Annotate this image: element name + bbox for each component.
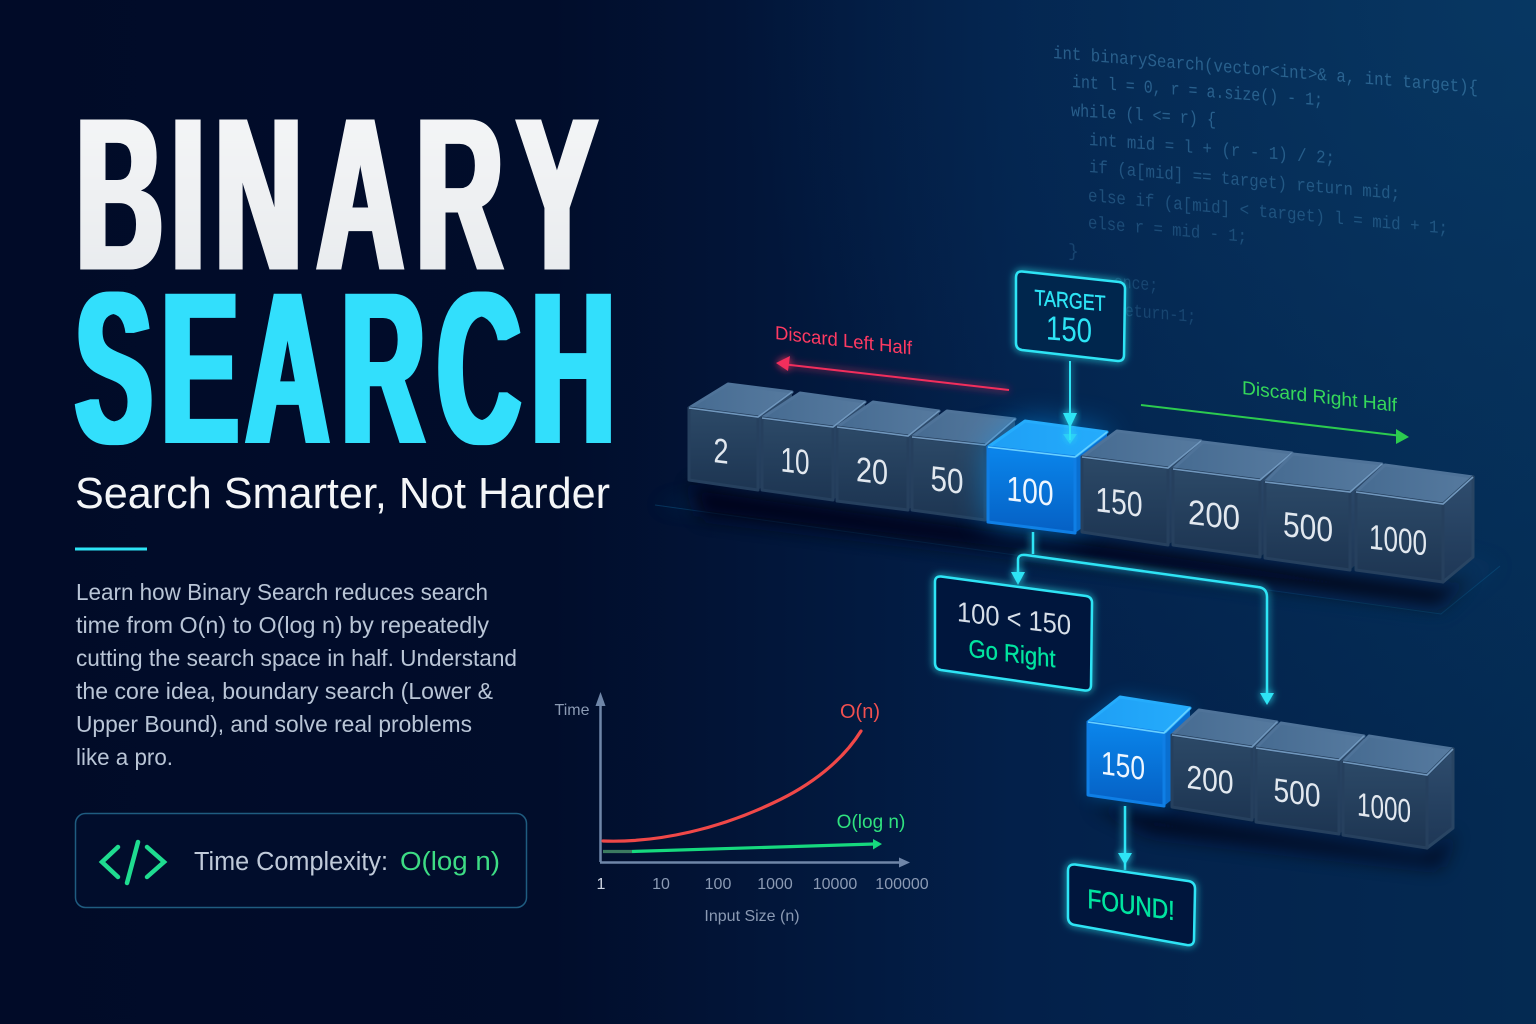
cube: 500: 500 (1274, 772, 1320, 815)
label: O(n): O(n) (840, 701, 880, 723)
cube: 500 (1265, 454, 1382, 570)
background code snippet: while (l <= r) { (1071, 102, 1216, 131)
target label: TARGET (1034, 285, 1106, 316)
floor plate (655, 420, 1500, 614)
description paragraph: cutting the search space in half. Understand (76, 645, 517, 671)
chart: time vs input size (555, 692, 929, 925)
label: discard right half: Discard Right Half (1242, 378, 1398, 417)
background code snippet: if (a[mid] == target) return mid; (1089, 158, 1400, 205)
x axis (600, 858, 910, 868)
cube: 150 (1082, 431, 1201, 545)
icon: code brackets (102, 842, 164, 883)
go right text: Go Right (968, 635, 1056, 673)
x axis ticks: 1000 (757, 876, 793, 893)
complexity label: Time Complexity: (194, 848, 388, 876)
x axis ticks: 1 (597, 876, 606, 893)
description paragraph (76, 579, 517, 770)
label: input size: Input Size (n) (704, 908, 800, 925)
cube: 2: 2 (714, 431, 728, 472)
cube: 1000 (1356, 465, 1473, 582)
complexity value: O(log n) (400, 848, 500, 876)
background code snippet: } (1068, 242, 1079, 263)
curve: O(n) (603, 731, 861, 841)
array: top row (689, 384, 1473, 582)
cube: 50: 50 (930, 459, 964, 502)
found text: FOUND! (1088, 883, 1174, 926)
subtitle: Search Smarter, Not Harder (75, 469, 610, 518)
array: bottom row (1088, 697, 1455, 868)
x axis ticks: 10 (652, 876, 670, 893)
title: SEARCH: SEARCH (75, 247, 615, 489)
arrow: to found (1118, 806, 1132, 870)
comparison text: 100 < 150 (957, 596, 1071, 641)
description paragraph: the core idea, boundary search (Lower & (76, 678, 493, 704)
label: Time: Time (555, 702, 590, 719)
cube: 500 (1256, 723, 1364, 834)
label: O(log n): O(log n) (837, 812, 905, 833)
background code snippet: else r = mid - 1; (1088, 214, 1247, 248)
cube: 100 highlighted (988, 421, 1107, 533)
x axis ticks (597, 876, 929, 893)
cube row shadow (690, 484, 1470, 606)
arrow: target to mid (1063, 361, 1077, 444)
background code snippet: once; (1114, 273, 1158, 297)
panel: time complexity (76, 814, 526, 908)
cube: 1000: 1000 (1369, 518, 1427, 564)
background code snippet: return-1; (1116, 301, 1196, 328)
cube: 20: 20 (856, 450, 888, 493)
cube: 200: 200 (1188, 493, 1240, 538)
cube: 2 (689, 384, 792, 490)
title: BINARY: BINARY (76, 74, 597, 317)
cube: 500: 500 (1283, 505, 1333, 550)
cube: 150: 150 (1096, 480, 1142, 525)
comparison callout (935, 576, 1092, 691)
cube: 150 highlighted (1088, 697, 1190, 806)
label: discard left half: Discard Left Half (775, 323, 913, 360)
cube: 1000: 1000 (1357, 786, 1411, 831)
description paragraph: Learn how Binary Search reduces search (76, 579, 488, 605)
cube: 200 (1173, 442, 1292, 557)
cube glow (1088, 697, 1190, 806)
cube: 200: 200 (1186, 759, 1234, 802)
curve: O(log n) (603, 839, 882, 852)
row shadow (1090, 804, 1455, 868)
description paragraph: like a pro. (76, 744, 173, 770)
background code snippet: int l = 0, r = a.size() - 1; (1072, 73, 1323, 111)
background code snippet: else if (a[mid] < target) l = mid + 1; (1088, 187, 1448, 240)
arrow: discard left (776, 356, 1009, 390)
background code snippet: int mid = l + (r - 1) / 2; (1089, 131, 1335, 169)
x axis ticks: 100 (705, 876, 731, 893)
background code snippet (1053, 44, 1478, 328)
cube: 50 (912, 411, 1015, 520)
description paragraph: Upper Bound), and solve real problems (76, 711, 472, 737)
accent line (75, 548, 147, 550)
arrow: discard right (1141, 405, 1409, 444)
x axis ticks: 100000 (875, 876, 929, 893)
cube: 20 (837, 402, 939, 510)
cube: 150 highlighted: 150 (1101, 745, 1145, 788)
background code snippet: int binarySearch(vector<int>& a, int target){ (1053, 44, 1478, 99)
description paragraph: time from O(n) to O(log n) by repeatedly (76, 612, 489, 638)
cube glow (988, 421, 1107, 533)
cube: 100 highlighted: 100 (1006, 469, 1054, 514)
target value: 150 (1046, 309, 1092, 351)
cube: 200 (1172, 710, 1277, 820)
cube: 10 (762, 393, 865, 500)
x axis ticks: 10000 (813, 876, 857, 893)
cube: 10: 10 (780, 440, 810, 483)
connector: branch to comparison and subarray (1011, 532, 1274, 705)
target callout (1016, 271, 1125, 361)
found callout (1068, 864, 1195, 945)
cube: 1000 (1343, 736, 1453, 848)
y axis (596, 692, 606, 862)
